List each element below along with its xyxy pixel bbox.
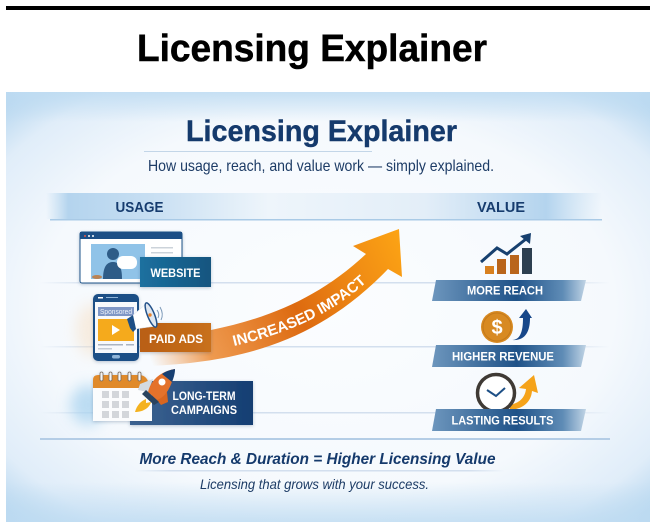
label: higher revenue: HIGHER REVENUE (452, 350, 554, 364)
arrow: increased impact (150, 229, 402, 366)
icon: website window (80, 232, 182, 283)
icon: megaphone (127, 302, 162, 332)
label: more reach: MORE REACH (467, 284, 543, 298)
label: lasting results (432, 409, 586, 431)
panel: infographic (6, 92, 650, 522)
dollar sign: $ (491, 317, 503, 339)
icon: calendar (93, 372, 152, 421)
top rule (6, 6, 650, 10)
icon: clock with arrow (478, 374, 538, 412)
tagline: Licensing that grows with your success. (200, 476, 429, 492)
heading: value: VALUE (477, 200, 525, 216)
panel heading: Licensing Explainer (186, 115, 457, 148)
label: paid ads: PAID ADS (149, 332, 203, 346)
glow behind calendar (70, 385, 106, 425)
subtitle: How usage, reach, and value work — simply explained. (148, 158, 494, 175)
glow behind phone (72, 302, 93, 358)
sponsored tag: Sponsored (100, 307, 132, 316)
icon: rocket (135, 369, 175, 412)
formula text: More Reach & Duration = Higher Licensing Value (140, 451, 496, 468)
label: long-term campaigns: LONG-TERM (172, 391, 236, 403)
page title: Licensing Explainer (137, 28, 487, 70)
label: more reach (432, 280, 586, 301)
label: long-term campaigns: CAMPAIGNS (171, 405, 237, 417)
label: website (140, 257, 211, 287)
label: long-term campaigns (130, 381, 253, 425)
label: lasting results: LASTING RESULTS (452, 414, 554, 428)
icon: phone ad (93, 294, 139, 361)
arrow label: INCREASED IMPACT (232, 274, 364, 346)
icon: growth chart (481, 233, 532, 274)
label: website: WEBSITE (150, 268, 201, 280)
label: higher revenue (432, 345, 586, 367)
heading: usage: USAGE (116, 200, 164, 216)
column header band (46, 193, 602, 220)
label: paid ads (140, 323, 211, 352)
icon: revenue coin (481, 309, 532, 343)
